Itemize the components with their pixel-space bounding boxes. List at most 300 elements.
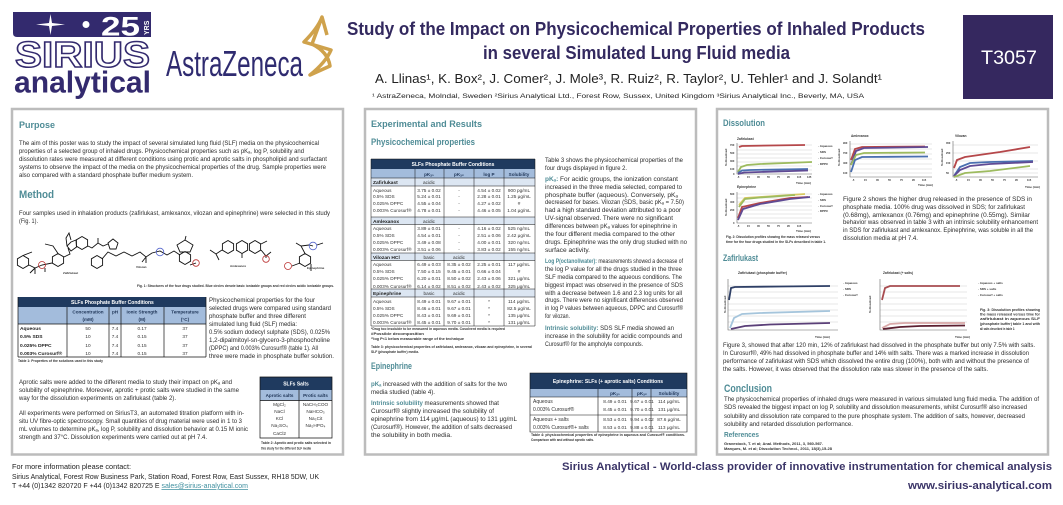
chart: zafirlukast dissolution — [724, 137, 833, 185]
text: purpose: dissolution rates were measured at different conditions using protic and aprotic salts in phospholipid and surfactant — [19, 156, 327, 163]
table: epinephrine conditions: 87.6 μg/mL — [657, 417, 681, 422]
logo: Sirius Analytical 25 years — [13, 12, 151, 100]
caption: table 2: Table 2: Aprotic and protic salts selected in — [261, 441, 331, 445]
chart: zafirlukast dissolution: 300 — [730, 159, 735, 163]
chart: zafirlukast dissolution: Time (min) — [796, 181, 811, 185]
text: SLF media description: 0.5% sodium dodecyl sulphate (SDS), 0.025% — [209, 329, 331, 336]
table: physicochemical properties: 0.5% SDS — [373, 306, 395, 311]
text: figure 3 discussion: In Curosurf®, 49% had dissolved in phosphate buffer and 14% with salts. There was a marked increase in dissolution — [723, 350, 1029, 357]
chart: zafirlukast dissolution: 75 — [777, 175, 780, 179]
chart: epinephrine dissolution: 115 — [797, 224, 802, 228]
table: physicochemical properties: pKₐ₂ — [454, 172, 464, 177]
chart: epinephrine dissolution: Epinephrine — [737, 185, 756, 189]
table: physicochemical properties: 0.003% Curosurf® — [373, 283, 412, 289]
text: epinephrine pKa: pKₐ increased with the addition of salts for the two — [371, 381, 508, 388]
table: epinephrine conditions: 8.53 ± 0.01 — [603, 425, 627, 430]
table: epinephrine conditions: 9.88 ± 0.01 — [630, 425, 654, 430]
text: figure 2 discussion: in SDS for zafirlukast and amlexanox. Epinephrine, was soluble in all the — [843, 227, 1034, 234]
table: SLF phosphate buffer conditions: 37 — [182, 334, 188, 339]
text: figure 2 discussion: (0.68mg), amlexanox (0.76mg) and epinephrine (0.55mg). Similar — [843, 212, 1030, 219]
table: SLFs salts: Na₂HPO₄ — [306, 423, 326, 428]
text: log P findings: Log P(octanol/water): measurements showed a decrease of — [545, 258, 683, 265]
panel: purpose and method — [12, 109, 343, 454]
caption: figure 3: (phosphate buffer) table 1 and with — [980, 322, 1040, 326]
table: SLFs salts: NaHCO₃ — [306, 409, 325, 414]
table: epinephrine conditions: 0.003% Curosurf®+ salts — [533, 424, 589, 431]
table: SLFs salts: NaCl — [274, 409, 285, 414]
heading: conclusion: Conclusion — [724, 383, 772, 395]
text: log P findings: the log P value for all the drugs studied in the three — [545, 266, 683, 273]
table: SLF phosphate buffer conditions: 10 — [85, 343, 91, 348]
table: physicochemical properties: Amlexanox — [373, 219, 399, 225]
table: physicochemical properties: - — [458, 201, 460, 206]
table: physicochemical properties: 2.42 μg/mL — [507, 233, 531, 238]
table: physicochemical properties: 321 μg/mL — [508, 276, 531, 281]
text: aprotic salts: way for the dissolution experiments on zafirlukast (table 2). — [18, 395, 176, 402]
chart: epinephrine dissolution: -5 — [737, 224, 740, 228]
table: SLFs salts: Protic salts — [303, 393, 328, 398]
table: physicochemical properties: 0.66 ± 0.04 — [477, 269, 501, 274]
chart: amlexanox dissolution: 900 — [843, 141, 848, 145]
chart: epinephrine dissolution: - SDS — [818, 198, 826, 202]
text: log P findings — [544, 258, 683, 320]
text: SLF media description: three were made in phosphate buffer solution. — [209, 353, 334, 360]
table: physicochemical properties: 8.35 ± 0.02 — [447, 262, 471, 267]
chart: zafirlukast in phosphate buffer: % dissolved — [723, 295, 727, 313]
table: epinephrine conditions: 113 μg/mL — [658, 425, 680, 430]
poster number box: T3057 — [981, 48, 1037, 69]
text: pKa findings: pKₐ: For acidic groups, the ionization constant — [545, 176, 678, 183]
text: conclusion: SDS revealed the biggest impact on log P, solubility and dissolution measurements, whilst Curosurf® also increased — [724, 404, 1027, 411]
table: physicochemical properties: 9.69 ± 0.01 — [447, 313, 471, 318]
chart: amlexanox dissolution: Time (min) — [918, 183, 933, 187]
poster number box — [963, 15, 1053, 99]
table: physicochemical properties — [371, 159, 535, 326]
text: aprotic salts — [18, 379, 240, 402]
table: physicochemical properties: 131 μg/mL — [508, 320, 531, 325]
table: physicochemical properties: 1.25 μg/mL — [507, 194, 531, 199]
table: physicochemical properties: 2.25 ± 0.01 — [477, 262, 501, 267]
table: epinephrine conditions: 114 μg/mL — [658, 399, 680, 404]
chart: amlexanox dissolution: -5 — [852, 178, 855, 182]
text: intrinsic solubility findings: Intrinsic solubility: SDS SLF media showed an — [545, 325, 674, 332]
caption: table 4: Table 4: physicochemical properties of epinephrine in aqueous and Curosurf® conditions. — [531, 433, 685, 437]
chart: epinephrine dissolution: 35 — [757, 224, 760, 228]
table: physicochemical properties: Aqueous — [373, 262, 392, 267]
chart: zafirlukast in phosphate buffer: - SDS — [843, 287, 851, 291]
table: SLFs salts: Aprotic salts — [266, 393, 294, 398]
structure: zafirlukast: Zafirlukast — [63, 271, 78, 275]
heading: experimental and results: Experimental and Results — [371, 119, 482, 130]
title — [347, 19, 925, 63]
table: SLF phosphate buffer conditions: 7.4 — [112, 334, 119, 339]
text: conclusion: solubility and retarded dissolution performance. — [724, 421, 853, 428]
text: epinephrine pKa: media studied (table 4). — [371, 389, 435, 396]
table: physicochemical properties: 0.5% SDS — [373, 233, 395, 238]
chart: vilozan dissolution: -5 — [955, 178, 958, 182]
caption: table 2: this study for the different SLF media — [261, 446, 311, 450]
text: SLF media description: phosphate buffer and three different — [209, 313, 306, 320]
text: pKa findings: UV-signal observed. There were no significant — [545, 215, 673, 222]
table: SLFs salts: KCl — [276, 416, 283, 421]
footnotes: table 3: ^log P<1 below measurable range of the technique — [371, 337, 464, 341]
caption: figure 3: all salts described in table 2. — [980, 327, 1015, 331]
text: method intro: (Fig. 1). — [19, 218, 38, 225]
table: physicochemical properties: 3.49 ± 0.08 — [417, 240, 441, 245]
chart: vilozan dissolution: 250 — [946, 151, 951, 155]
text: table 3 intro: Table 3 shows the physicochemical properties of the — [545, 157, 684, 164]
table: physicochemical properties: 3.89 ± 0.01 — [417, 226, 441, 231]
table: epinephrine conditions: Aqueous — [533, 399, 553, 405]
footnotes: table 3 — [371, 327, 505, 341]
structure: amlexanox — [210, 240, 271, 268]
text: intrinsic solubility findings: Curosurf® for the ampholyte compounds. — [545, 341, 643, 348]
text: conclusion: solubility and dissolution rate compared to the pure phosphate system. The addition of salts, however, decreased — [724, 413, 1025, 420]
text: figure 2 discussion: behavior was observed in table 3 with an intrinsic solubility enhancement — [843, 219, 1038, 226]
table: SLF phosphate buffer conditions: SLFs Phosphate Buffer Conditions — [71, 300, 154, 306]
chart: vilozan dissolution: % dissolved — [940, 148, 944, 166]
text: log P findings: drugs. There were no significant differences observed — [545, 297, 683, 304]
table: physicochemical properties: 4.55 ± 0.04 — [417, 201, 441, 206]
table: physicochemical properties: 8.46 ± 0.01 — [417, 306, 441, 311]
table: SLF phosphate buffer conditions: 7.4 — [112, 351, 119, 356]
title: Study of the Impact on Physicochemical Properties of Inhaled Products — [347, 19, 925, 39]
text: pKa findings: decreased for bases. Vilozan (SDS, basic pKₐ = 7.50) — [545, 199, 684, 206]
table: physicochemical properties: 3.51 ± 0.06 — [417, 247, 441, 252]
chart: epinephrine dissolution: 0 — [733, 221, 735, 225]
caption: table 4: Comparison with and without aprotic salts. — [531, 438, 594, 442]
chart: vilozan dissolution: 50 — [946, 171, 949, 175]
chart: zafirlukast with salts: - Curosurf + salts — [978, 293, 1003, 297]
table: physicochemical properties: 325 μg/mL — [508, 284, 531, 289]
table: physicochemical properties: basic — [424, 291, 435, 296]
text: conclusion — [724, 396, 1039, 428]
chart: amlexanox dissolution: 100 — [843, 171, 848, 175]
contact details: Sirius Analytical, Forest Row Business Park, Station Road, Forest Row, East Sussex, RH18 5DW, UK — [12, 472, 319, 481]
table: physicochemical properties: 1.04 μg/mL — [507, 208, 531, 213]
table: physicochemical properties: SLFs Phosphate Buffer Conditions — [412, 162, 495, 168]
table: SLF phosphate buffer conditions: Temperature — [171, 310, 199, 314]
chart: zafirlukast dissolution: - Curosurf — [818, 156, 832, 160]
table: SLF phosphate buffer conditions: (°C) — [181, 317, 190, 322]
table: epinephrine conditions: pKₐ₁ — [610, 391, 620, 396]
chart: amlexanox dissolution: 35 — [876, 178, 879, 182]
logo: AstraZeneca — [166, 17, 331, 84]
table: physicochemical properties: 4.54 ± 0.01 — [417, 233, 441, 238]
table: physicochemical properties: # — [518, 201, 521, 206]
table: SLFs salts: CaCl2 — [273, 431, 286, 436]
chart: epinephrine dissolution: 75 — [777, 224, 780, 228]
chart: zafirlukast dissolution: 15 — [747, 175, 750, 179]
table: physicochemical properties: 8.49 ± 0.01 — [417, 299, 441, 304]
chart: amlexanox dissolution: Amlexanox — [851, 134, 869, 138]
caption: table 2 — [261, 441, 331, 450]
chart: vilozan dissolution: 55 — [991, 178, 994, 182]
table: physicochemical properties: - — [458, 240, 460, 245]
caption: table 3: SLF (phosphate buffer) media. — [371, 350, 419, 354]
chart: epinephrine dissolution: 400 — [730, 200, 735, 204]
table: physicochemical properties: 4.54 ± 0.02 — [477, 188, 501, 193]
table: physicochemical properties: 2.43 ± 0.06 — [477, 276, 501, 281]
footnotes: table 3: *Drug too insoluble to be measured in aqueous media. Cosolvent media is required — [371, 327, 505, 331]
table: physicochemical properties: 135 μg/mL — [508, 313, 531, 318]
text: epinephrine pKa — [371, 381, 508, 396]
chart: zafirlukast with salts: Time (min) — [955, 335, 970, 339]
chart: amlexanox dissolution: 400 — [843, 161, 848, 165]
text: figure 3 discussion: performance of zafirlukast with SDS which dissolved the entire drug (100%), both with and without the presence of — [723, 358, 1029, 365]
chart: epinephrine dissolution: - Curosurf — [818, 204, 832, 208]
caption: table 4 — [531, 433, 685, 442]
chart: epinephrine dissolution: - Aqueous — [818, 192, 833, 196]
chart: zafirlukast in phosphate buffer — [723, 271, 858, 339]
chart: zafirlukast dissolution: - SDS — [818, 150, 826, 154]
chart: zafirlukast dissolution: 0 — [733, 172, 735, 176]
caption: figure 2 — [726, 235, 826, 244]
table: physicochemical properties: acidic — [453, 291, 466, 296]
table: physicochemical properties: 117 μg/mL — [508, 262, 530, 267]
table: physicochemical properties: 9.45 ± 0.01 — [447, 269, 471, 274]
table: SLF phosphate buffer conditions: 10 — [85, 334, 91, 339]
chart: zafirlukast in phosphate buffer: - Curosurf — [843, 293, 858, 297]
structure: epinephrine: Epinephrine — [307, 266, 325, 270]
chart: zafirlukast dissolution: -5 — [737, 175, 740, 179]
chart: epinephrine dissolution: 55 — [767, 224, 770, 228]
text: pKa findings: phosphate buffer (aqueous). Conversely, pKₐ — [545, 192, 679, 199]
table: epinephrine conditions: Aqueous + salts — [533, 417, 569, 423]
heading: zafirlukast: Zafirlukast — [723, 253, 759, 264]
text: experiments: All experiments were performed on SiriusT3, an automated titration platform with in- — [19, 410, 244, 417]
chart: amlexanox dissolution — [837, 134, 933, 187]
chart: vilozan dissolution: Vilozan — [955, 134, 966, 138]
table: SLFs salts: Na₂SO₄ — [271, 423, 288, 428]
text: pKa findings: surface activity. — [545, 247, 590, 254]
text: SLF media description — [209, 297, 334, 360]
logo: Sirius Analytical 25 years: YRS — [144, 20, 151, 35]
chart: zafirlukast dissolution: 100 — [730, 167, 735, 171]
logo: Sirius Analytical 25 years: SIRIUS — [15, 34, 150, 75]
chart: zafirlukast dissolution: 115 — [797, 175, 802, 179]
text: references — [724, 442, 832, 451]
text: pKa findings: had a high standard deviation attributed to a poor — [545, 207, 681, 214]
caption: figure 2: time for the four drugs studied in the SLFs described in table 1. — [726, 240, 826, 244]
logo: Sirius Analytical 25 years: analytical — [14, 64, 151, 100]
table: SLF phosphate buffer conditions: Concentration — [72, 310, 104, 314]
table: epinephrine conditions — [530, 373, 687, 432]
table: SLF phosphate buffer conditions: 10 — [85, 351, 91, 356]
chart: epinephrine dissolution: - DPPC — [818, 209, 829, 213]
table: physicochemical properties: 525 ng/mL — [508, 226, 530, 231]
table: physicochemical properties: acidic — [453, 255, 466, 260]
text: purpose: The aim of this poster was to study the impact of several simulated lung fluid (SLF) media on the physicochemical — [19, 140, 319, 147]
table: physicochemical properties: 0.003% Curosurf® — [373, 246, 412, 252]
table: physicochemical properties: acidic — [423, 180, 436, 185]
text: SLF media description: 1,2-dipalmitoyl-sn-glycero-3-phosphocholine — [209, 337, 331, 344]
table: physicochemical properties: log P — [483, 172, 495, 177]
table: physicochemical properties: 9.67 ± 0.01 — [447, 299, 471, 304]
table: physicochemical properties: 900 pg/mL — [508, 188, 530, 193]
table: physicochemical properties: * — [488, 320, 490, 325]
caption: figure 3 — [980, 308, 1041, 331]
table: physicochemical properties: 4.46 ± 0.05 — [477, 208, 501, 213]
table: epinephrine conditions: 9.94 ± 0.02 — [630, 417, 654, 422]
table: SLF phosphate buffer conditions: 0.15 — [137, 351, 147, 356]
text: table 3 intro — [545, 157, 684, 172]
table: physicochemical properties: - — [458, 226, 460, 231]
table: physicochemical properties: 6.20 ± 0.01 — [417, 276, 441, 281]
text: pKa findings: differences between pKₐ values for epinephrine in — [545, 223, 677, 230]
table: epinephrine conditions: 8.45 ± 0.01 — [603, 407, 627, 412]
table: physicochemical properties: 4.16 ± 0.02 — [477, 226, 501, 231]
chart: zafirlukast with salts: Zafirlukast (+ salts) — [883, 271, 913, 275]
heading: dissolution: Dissolution — [723, 118, 765, 129]
table: physicochemical properties: 4.27 ± 0.02 — [477, 201, 501, 206]
table: physicochemical properties: 3.83 ± 0.02 — [477, 247, 501, 252]
table: physicochemical properties: - — [458, 208, 460, 213]
text: figure 2 discussion: phosphate media. 100% drug was dissolved in SDS; for zafirlukast — [843, 204, 1025, 211]
table: SLF phosphate buffer conditions: Ionic Strength — [127, 310, 158, 314]
chart: epinephrine dissolution: 15 — [747, 224, 750, 228]
text: aprotic salts: solubility of epinephrine. Moreover, aprotic + protic salts were studied in the same — [19, 387, 240, 394]
chart: chemical structures — [17, 233, 325, 275]
chart: vilozan dissolution: 35 — [979, 178, 982, 182]
caption: figure 3: Fig. 3: Dissolution profiles showing — [980, 308, 1040, 312]
table: SLF phosphate buffer conditions — [18, 297, 206, 357]
table: physicochemical properties: 6.49 ± 0.03 — [417, 262, 441, 267]
chart: zafirlukast dissolution: - DPPC — [818, 162, 829, 166]
text: experiments: strength and 37°C. Dissolution experiments were carried out at pH 7.4. — [19, 434, 207, 441]
chart: zafirlukast with salts: - Aqueous + salts — [978, 281, 1003, 285]
table: epinephrine conditions: 8.49 ± 0.01 — [603, 399, 627, 404]
table: SLF phosphate buffer conditions: 37 — [182, 351, 188, 356]
text: method intro: Four samples used in inhalation products (zafirlukast, amlexanox, vilozan and epinephrine) were selected in this study — [19, 210, 331, 217]
table: physicochemical properties: 8.45 ± 0.01 — [417, 320, 441, 325]
text: pKa findings — [545, 176, 688, 254]
table: physicochemical properties: 114 μg/mL — [508, 299, 530, 304]
text: figure 3 discussion: the salts. However, it was observed that the dissolution rate was slower in the presence of the salts. — [723, 366, 988, 373]
chart: epinephrine dissolution — [724, 185, 833, 233]
chart: amlexanox dissolution: 95 — [912, 178, 915, 182]
caption: figure 3: the mass released versus time for — [980, 312, 1041, 316]
table: physicochemical properties: 320 ng/mL — [508, 240, 530, 245]
footer tagline: Sirius Analytical - World-class provider of innovative instrumentation for chemical analysis — [562, 461, 1052, 473]
authors: A. Llinas¹, K. Box², J. Comer², J. Mole³, R. Ruiz², R. Taylor², U. Tehler¹ and J. Solandt¹ — [375, 72, 882, 86]
table: physicochemical properties: Zafirlukast — [373, 180, 398, 186]
table: physicochemical properties: * — [488, 313, 490, 318]
chart: epinephrine dissolution: Time (min) — [796, 229, 811, 233]
text: experiments: situ UV fibre-optic spectroscopy. Small quantities of drug material were used in 1 to 3 — [19, 418, 243, 425]
structure: vilozan: Vilozan — [136, 265, 147, 269]
chart: epinephrine dissolution: 200 — [730, 208, 735, 212]
table: physicochemical properties: 7.50 ± 0.15 — [417, 269, 441, 274]
chart: epinephrine dissolution: 95 — [787, 224, 790, 228]
caption: table 1: Table 1: Properties of the solutions used in this study — [18, 359, 103, 363]
table: physicochemical properties: - — [458, 194, 460, 199]
table: physicochemical properties: 82.5 μg/mL — [507, 306, 531, 311]
table: physicochemical properties: * — [488, 299, 490, 304]
table: physicochemical properties: 0.003% Curosurf® — [373, 207, 412, 213]
chart: amlexanox dissolution: 15 — [864, 178, 867, 182]
heading: method: Method — [19, 189, 54, 201]
chart: zafirlukast with salts: - SDS + salts — [978, 287, 997, 291]
table: physicochemical properties: 8.51 ± 0.02 — [447, 284, 471, 289]
text: epinephrine solubility: (Curosurf®). However, the addition of salts decreased — [371, 424, 512, 431]
table: epinephrine conditions: 9.70 ± 0.01 — [630, 407, 654, 412]
table: physicochemical properties: 155 ng/mL — [508, 247, 530, 252]
chart: amlexanox dissolution: 115 — [922, 178, 927, 182]
chart: zafirlukast in phosphate buffer: Time (min) — [815, 335, 830, 339]
text: log P findings: biggest impact was observed in the presence of SDS — [545, 282, 683, 289]
table: physicochemical properties: 9.67 ± 0.01 — [447, 306, 471, 311]
structure: amlexanox: Amlexanox — [230, 264, 246, 268]
text: experiments — [19, 410, 248, 441]
table: physicochemical properties: 0.5% SDS — [373, 194, 395, 199]
table: epinephrine conditions: 131 μg/mL — [658, 407, 681, 412]
table: physicochemical properties: * — [488, 306, 490, 311]
logo: Sirius Analytical 25 years: 25 — [101, 12, 140, 42]
chart: zafirlukast dissolution: 95 — [787, 175, 790, 179]
table: SLF phosphate buffer conditions: 0.15 — [137, 343, 147, 348]
text: purpose: properties of a selected group of inhaled drugs. Physicochemical properties such as pKₐ, log P, solubility and — [19, 148, 304, 155]
table: SLFs salts: NaCH₃COO — [303, 402, 329, 407]
table: physicochemical properties: - — [458, 188, 460, 193]
table: SLFs salts — [260, 377, 332, 438]
chart: vilozan dissolution: 115 — [1027, 178, 1032, 182]
table: physicochemical properties: 8.50 ± 0.02 — [447, 276, 471, 281]
table: SLF phosphate buffer conditions: 37 — [182, 343, 188, 348]
caption: figure 3: zafirlukast in aqueous SLF — [980, 317, 1040, 321]
caption: table 3 — [371, 345, 532, 354]
chart: amlexanox dissolution: 75 — [900, 178, 903, 182]
chart: zafirlukast dissolution: % dissolved — [724, 148, 728, 166]
heading: physicochemical properties: Physicochemical properties — [371, 137, 475, 148]
footer website: www.sirius-analytical.com — [907, 480, 1052, 492]
text: figure 3 discussion: Figure 3, showed that after 120 min, 12% of zafirlukast had dissolved in the phosphate buffer but only 7.5% with salts. — [723, 342, 1035, 349]
chart: zafirlukast dissolution: 135 — [807, 175, 812, 179]
table: physicochemical properties: pKₐ₁ — [424, 172, 434, 177]
table: physicochemical properties: 4.00 ± 0.01 — [477, 240, 501, 245]
text: log P findings: for vilozan. — [545, 313, 570, 320]
table: physicochemical properties: 9.70 ± 0.01 — [447, 320, 471, 325]
text: epinephrine solubility — [371, 400, 518, 439]
panel: experimental and results — [365, 109, 696, 454]
table: SLFs salts: MgCl₂ — [273, 402, 286, 407]
text: log P findings: in log P values between aqueous, DPPC and Curosurf® — [545, 305, 683, 312]
table: SLF phosphate buffer conditions: 50 — [85, 326, 91, 331]
table: physicochemical properties: - — [458, 233, 460, 238]
table: SLF phosphate buffer conditions: 7.4 — [112, 343, 119, 348]
chart: vilozan dissolution: 150 — [946, 161, 951, 165]
text: references: Marques, M. et al; Dissolution Technol., 2011, 18(3),15-28 — [724, 447, 832, 451]
text: experiments: mL volumes to determine pKₐ, log P, solubility and dissolution behavior at 0.15 M ionic — [19, 426, 248, 433]
text: epinephrine solubility: Intrinsic solubility measurements showed that — [371, 400, 499, 407]
table: physicochemical properties: Aqueous — [373, 299, 392, 304]
table: physicochemical properties: 5.24 ± 0.01 — [417, 194, 441, 199]
table: epinephrine conditions: Solubility — [659, 391, 680, 396]
table: SLF phosphate buffer conditions: 7.4 — [112, 326, 119, 331]
text: pKa findings: the four different media compared to the other — [545, 231, 675, 238]
chart: zafirlukast in phosphate buffer: - Aqueous — [843, 281, 858, 285]
caption: table 3: Table 3: physicochemical properties of zafirlukast, amlexanox, vilozan and epinephrine, in several — [371, 345, 532, 349]
table: physicochemical properties: 0.003% Curosurf® — [373, 319, 412, 325]
table: physicochemical properties: 6.14 ± 0.02 — [417, 284, 441, 289]
text: log P findings: with a decrease between 1.6 and 2.3 log units for all — [544, 290, 682, 297]
contact details: For more information please contact: — [12, 462, 131, 471]
table: physicochemical properties: 0.025% DPPC — [373, 240, 404, 245]
table: epinephrine conditions: Epinephrine: SLFs (+ aprotic salts) Conditions — [553, 379, 663, 385]
chart: vilozan dissolution: 15 — [967, 178, 970, 182]
chart: zafirlukast in phosphate buffer: Zafirlukast (phosphate buffer) — [738, 271, 787, 275]
table: epinephrine conditions: 0.003% Curosurf® — [533, 406, 575, 413]
